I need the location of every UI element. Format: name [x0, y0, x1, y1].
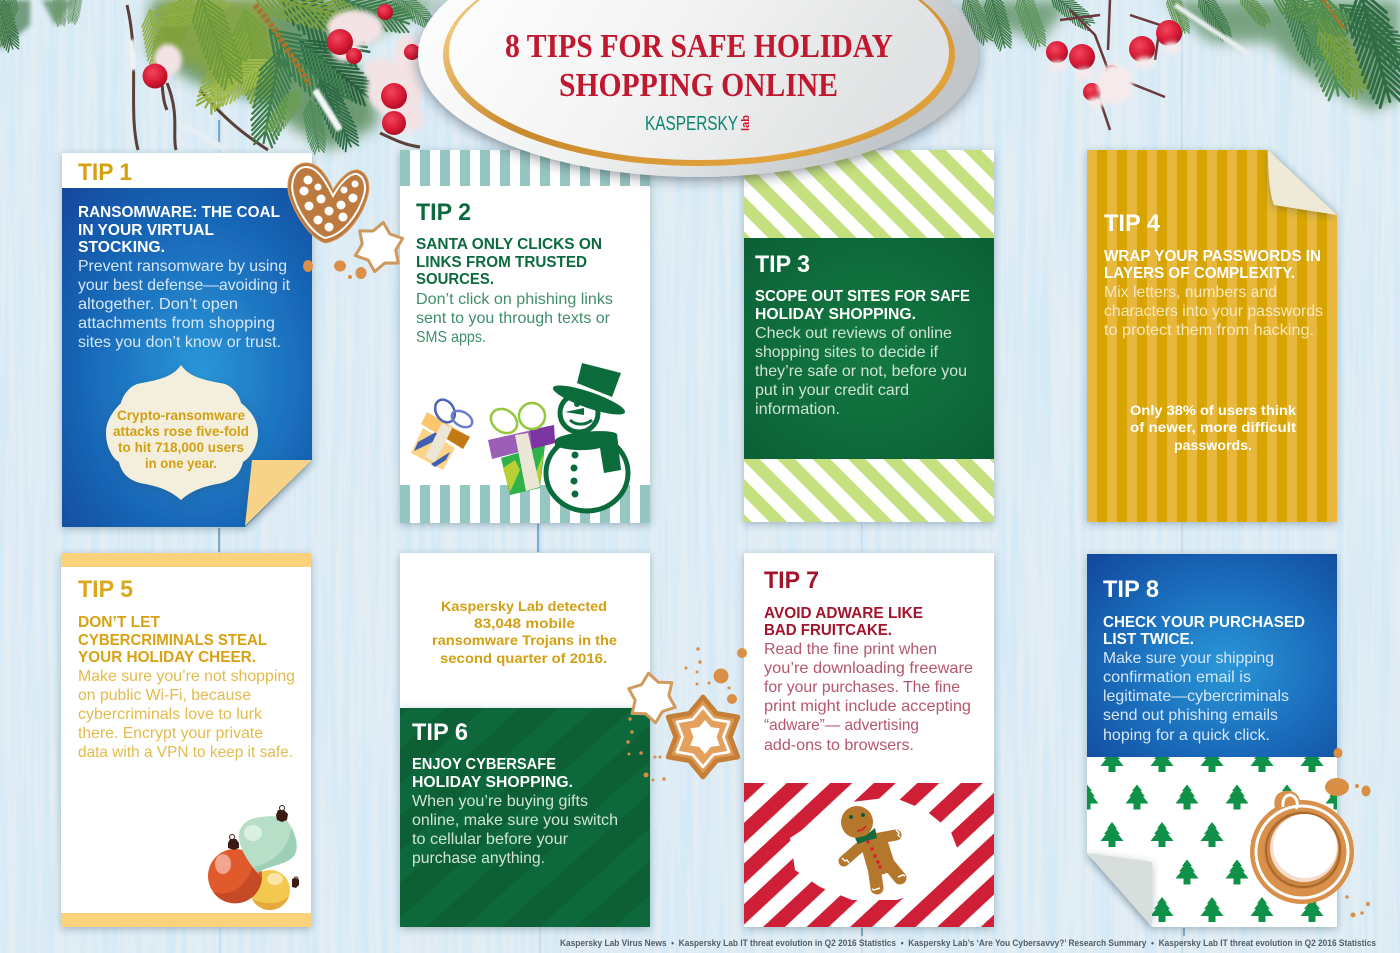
folded corner: [1268, 150, 1337, 215]
icon: blue gift: [411, 396, 475, 470]
tip 2 label: TIP 2: [416, 199, 471, 226]
bottom band: [61, 913, 311, 927]
tip 3 text: shopping sites to decide if: [755, 344, 939, 361]
card body: [400, 150, 650, 523]
tip 8 text: confirmation email is: [1103, 669, 1251, 686]
tip 4 text: LAYERS OF COMPLEXITY.: [1104, 265, 1295, 282]
folded corner: [1088, 853, 1152, 926]
panel: tip 1: [62, 153, 312, 527]
tip 6 text: to cellular before your: [412, 831, 569, 848]
pine branch: top left with berries: [0, 0, 445, 155]
tip 2 text: sent to you through texts or: [416, 310, 611, 327]
tip 3 text: they’re safe or not, before you: [755, 363, 967, 380]
title: 8 TIPS FOR SAFE HOLIDAY: [505, 28, 893, 65]
tree pattern: [1087, 750, 1337, 927]
tip 6 statistic: ransomware Trojans in the: [432, 632, 617, 648]
panel: tip 6: [400, 553, 650, 927]
cookie crumbs: [626, 647, 747, 782]
tip 5 text: [78, 614, 295, 761]
card body: [1087, 554, 1337, 927]
icon: iced star cookie: [668, 697, 738, 777]
tip 1 text: [78, 204, 291, 351]
tip 4 label: TIP 4: [1104, 210, 1161, 237]
tip 3 text: [755, 288, 970, 418]
tip 2 text: LINKS FROM TRUSTED: [416, 254, 587, 271]
callout badge: to hit 718,000 users: [118, 439, 244, 455]
card body: [1087, 150, 1337, 522]
title: [505, 28, 893, 104]
tip 8 text: legitimate—cybercriminals: [1103, 688, 1289, 705]
icon: gingerbread man: [841, 806, 905, 890]
icon: ornaments: [208, 806, 299, 910]
tip 1 text: Prevent ransomware by using: [78, 258, 287, 275]
green band: [400, 708, 650, 927]
tip 7 text: for your purchases. The fine: [764, 679, 960, 696]
tip 2 text: Don’t click on phishing links: [416, 291, 613, 308]
tip 6 statistic: Kaspersky Lab detected: [441, 598, 607, 614]
tip 1 text: attachments from shopping: [78, 315, 275, 332]
panel: tip 3: [744, 150, 994, 522]
callout badge: attacks rose five-fold: [113, 423, 249, 439]
tip 1 text: IN YOUR VIRTUAL: [78, 222, 214, 239]
tip 1 label: TIP 1: [78, 159, 132, 186]
icon: star cookie: [353, 219, 405, 275]
tip 1 text: sites you don’t know or trust.: [78, 334, 281, 351]
tip 2 text: SMS apps.: [416, 329, 486, 346]
top stripes: [400, 150, 650, 186]
tip 4 text: WRAP YOUR PASSWORDS IN: [1104, 248, 1321, 265]
outer rim: [418, 0, 978, 177]
tip 1 text: altogether. Don’t open: [78, 296, 238, 313]
tip 6 text: When you’re buying gifts: [412, 793, 588, 810]
tip 8 label: TIP 8: [1103, 576, 1159, 603]
tip 6 text: HOLIDAY SHOPPING.: [412, 774, 573, 791]
tip 5 text: Make sure you’re not shopping: [78, 668, 295, 685]
tip 6 statistic: second quarter of 2016.: [440, 650, 607, 666]
blue band: [1087, 554, 1337, 757]
cookie crumbs: [1325, 748, 1370, 918]
tip 7 text: you’re downloading freeware: [764, 660, 973, 677]
tip 8 text: Make sure your shipping: [1103, 650, 1274, 667]
cookie crumbs: [303, 260, 366, 279]
tip 7 label: TIP 7: [764, 567, 819, 594]
tip 6 statistic: 83,048 mobile: [474, 615, 575, 631]
tip 7 text: Read the fine print when: [764, 641, 937, 658]
icon: heart cookie: [288, 163, 369, 243]
bottom stripes: [400, 485, 650, 523]
tip 6 text: ENJOY CYBERSAFE: [412, 756, 556, 773]
tip 7 text: add-ons to browsers.: [764, 737, 914, 754]
tip 2 text: [416, 236, 613, 346]
tip 7 text: print might include accepting: [764, 698, 971, 715]
card body: [400, 553, 650, 709]
tip 6 text: online, make sure you switch: [412, 812, 618, 829]
tip 4 text: Mix letters, numbers and: [1104, 284, 1277, 301]
tip 3 text: put in your credit card: [755, 382, 909, 399]
icon: purple gift: [486, 403, 555, 495]
tip 6 label: TIP 6: [412, 719, 468, 746]
card body: [61, 553, 311, 927]
gold ring: [443, 0, 955, 166]
tip 8 text: [1103, 614, 1305, 744]
card body: [744, 553, 994, 927]
tip 4 text: characters into your passwords: [1104, 303, 1323, 320]
icon: snowman: [546, 363, 628, 511]
tip 5 text: DON’T LET: [78, 614, 160, 631]
tip 5 text: data with a VPN to keep it safe.: [78, 744, 293, 761]
folded corner: [245, 460, 312, 526]
tip 4 statistic: Only 38% of users think: [1130, 402, 1296, 418]
tip 5 text: on public Wi-Fi, because: [78, 687, 251, 704]
panel: tip 8: [1087, 554, 1337, 927]
panel: tip 2: [400, 150, 650, 523]
tip 6 text: [412, 756, 618, 867]
tip 4 text: to protect them from hacking.: [1104, 322, 1314, 339]
tip 6 text: purchase anything.: [412, 850, 545, 867]
tip 8 text: hoping for a quick click.: [1103, 727, 1270, 744]
tip 1 text: RANSOMWARE: THE COAL: [78, 204, 280, 221]
pine branch: top right with berries: [957, 0, 1400, 130]
top band: [61, 553, 311, 567]
title: SHOPPING ONLINE: [559, 67, 838, 104]
tip 3 label: TIP 3: [755, 251, 810, 278]
tip 2 text: SOURCES.: [416, 271, 494, 288]
tip 3 text: SCOPE OUT SITES FOR SAFE: [755, 288, 970, 305]
tip 3 text: information.: [755, 401, 840, 418]
tip 4 statistic: [1130, 402, 1296, 453]
tip 5 text: CYBERCRIMINALS STEAL: [78, 632, 267, 649]
tip 2 text: SANTA ONLY CLICKS ON: [416, 236, 602, 253]
tip 1 text: your best defense—avoiding it: [78, 277, 291, 294]
tip 8 text: send out phishing emails: [1103, 707, 1278, 724]
icon: plain star cookie: [627, 670, 677, 726]
card body: [744, 150, 994, 522]
icon: ring cookie: [1250, 791, 1354, 904]
callout badge: Crypto-ransomware: [117, 407, 245, 423]
tip 7 text: BAD FRUITCAKE.: [764, 622, 892, 639]
tip 3 text: HOLIDAY SHOPPING.: [755, 306, 916, 323]
panel: tip 7: [744, 553, 994, 927]
panel: tip 4: [1087, 150, 1337, 522]
logo: lab: [740, 115, 752, 131]
tip 4 statistic: of newer, more difficult: [1130, 419, 1296, 435]
tip 5 text: there. Encrypt your private: [78, 725, 263, 742]
tip 3 text: Check out reviews of online: [755, 325, 952, 342]
tip 6 statistic: [432, 598, 617, 666]
tip 5 text: cybercriminals love to lurk: [78, 706, 263, 723]
white patch behind gingerbread: [790, 797, 960, 900]
green band: [744, 238, 994, 459]
panel: tip 5: [61, 553, 311, 927]
striped area: [744, 783, 994, 927]
tip 7 text: [764, 605, 973, 754]
card body: [62, 153, 312, 527]
tip 7 text: “adware”— advertising: [764, 717, 919, 734]
tip 8 text: LIST TWICE.: [1103, 631, 1194, 648]
callout badge: [106, 365, 258, 500]
tip 1 text: STOCKING.: [78, 239, 165, 256]
tip 4 text: [1104, 248, 1323, 339]
inner plate: [449, 0, 949, 160]
tip 4 statistic: passwords.: [1174, 437, 1252, 453]
title oval: [418, 0, 978, 177]
callout badge: in one year.: [145, 455, 217, 471]
tip 5 text: YOUR HOLIDAY CHEER.: [78, 649, 256, 666]
logo: KASPERSKY: [645, 113, 738, 135]
tip 8 text: CHECK YOUR PURCHASED: [1103, 614, 1305, 631]
tip 7 text: AVOID ADWARE LIKE: [764, 605, 923, 622]
tip 5 label: TIP 5: [78, 576, 133, 603]
